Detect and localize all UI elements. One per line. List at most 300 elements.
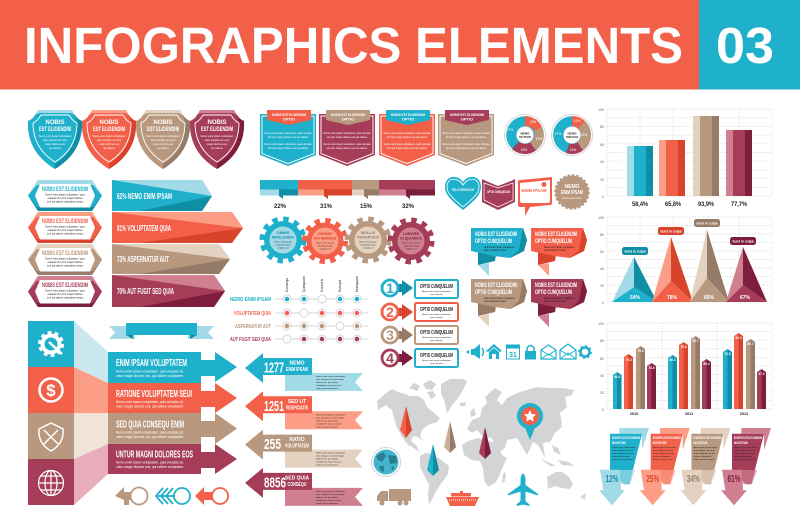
downward arrow panels: sequi nesciunt neque [612, 458, 633, 461]
grouped column chart: 74.8 [648, 366, 655, 370]
downward arrow panels: ratione voluptatem [653, 455, 671, 458]
downward arrow panels: Nemo enim ipsam volup [653, 447, 677, 449]
downward arrow panels: magni dolores eos qui [693, 452, 715, 455]
icon: calendar: 31 [509, 352, 517, 359]
hexagon text boxes: Nemo enim ipsam voluptatem, quia [45, 194, 85, 196]
downward arrow panels: 25% [646, 473, 660, 485]
pyramid chart: 60 [600, 250, 604, 254]
shield badges: NOBIS [45, 120, 65, 126]
hexagon text boxes: NOBIS EST ELIGENDIM [42, 187, 88, 193]
gear badges: voluptatem quia [317, 244, 334, 248]
pyramid chart: 80 [600, 233, 604, 237]
tag boxes with ribbons: sit untur magni dolores eos qui ratione [387, 147, 428, 150]
tag boxes with ribbons: sit untur magni dolores eos qui ratione [446, 147, 487, 150]
downward arrow panels: magni dolores eos qui [612, 452, 634, 455]
numbered steps: 4 [386, 350, 394, 366]
tag boxes with ribbons: sit untur magni dolores eos qui ratione [387, 136, 428, 139]
tan seal badge: Nemo enim ipsam [562, 197, 582, 200]
grouped column chart: 80.7 [747, 342, 754, 346]
speech bubble badge [518, 177, 552, 216]
shield badges: qui ratione [103, 147, 115, 150]
gear badges: OMNIS [277, 231, 290, 235]
tag boxes with ribbons [260, 110, 494, 166]
gear badges: MOLLIS [361, 231, 376, 235]
gear badges: voluptas sit [406, 248, 417, 250]
shield badges: Nemo enim ipsam voluptatem [92, 135, 126, 138]
left arrow stat rows: dolores eos qui ratione [316, 496, 339, 499]
grouped column chart: 20 [600, 391, 604, 395]
axis labels: 80 [600, 125, 604, 129]
circle arrows row [115, 487, 228, 505]
ribbon banner [109, 323, 214, 339]
arrow row: maroon: Nemo enim ipsam voluptatem, quia voluptas sit, [116, 460, 184, 464]
gear badges: LABORE [403, 232, 419, 236]
downward arrow panels: 12% [606, 473, 619, 485]
icon: speaker [466, 344, 484, 359]
tag boxes with ribbons: Nemo enim ipsam voluptatem, quia voluptas [442, 143, 490, 146]
axis labels: 0 [602, 195, 604, 199]
grouped column chart: 0 [602, 408, 604, 412]
tag boxes with ribbons: OPTIO [283, 116, 295, 122]
numbered steps: OPTIO CUMQUELUM [420, 284, 453, 290]
map pin: coral spike [400, 406, 412, 438]
folded ribbon callouts: quia voluptas sit untur [544, 300, 567, 303]
gear badges: REPELLENDUS [272, 236, 294, 240]
row labels: AUT FUGIT SED QUIA [230, 337, 271, 343]
left arrow stat rows: neque porro quisquam [316, 425, 338, 428]
downward arrow panels: Nemo enim ipsam volup [612, 447, 636, 449]
pyramid chart: 67% [740, 295, 751, 301]
icon row [466, 344, 591, 360]
gear badges: Nemo enim ipsam [274, 242, 292, 244]
arrow row: teal: Nemo enim ipsam voluptatem, quia voluptas sit, [116, 370, 184, 374]
hexagon text boxes: eos qui ratione voluptatem sequi [47, 232, 83, 236]
downward arrow panels: EXERCITATIONEM [734, 436, 762, 440]
left arrow stat rows: neque porro quisquam [316, 387, 338, 390]
arrow row: tan [108, 413, 237, 444]
donut chart 1: 37% [507, 128, 513, 132]
donut chart 1 [504, 114, 546, 156]
numbered steps: 1 [386, 280, 394, 296]
left arrow stat rows: Nemo enim ipsam voluptatem [316, 490, 345, 493]
axis labels: 40 [600, 160, 604, 164]
grouped column chart: 85.7 [692, 339, 699, 343]
arrow row: teal: ENIM IPSAM VOLUPTATEM [116, 358, 187, 369]
grouped column chart: 80 [600, 339, 604, 343]
left arrow stat rows: voluptatem sequi nesciunt [316, 384, 342, 387]
shield badges: Nemo enim ipsam voluptatem [200, 135, 234, 138]
folded ribbon callouts: Nemo enim ipsam voluptatem, [544, 246, 575, 249]
donut chart 2: 47% [555, 132, 561, 136]
downward arrow panels: quia voluptas sit untur [653, 449, 674, 452]
left arrow stat rows: 255 [264, 436, 281, 453]
icon: globe [372, 448, 400, 476]
left arrow stat rows: SED UT [288, 399, 306, 405]
shield badges: magni dolores eos [45, 143, 66, 146]
left arrow stat rows [245, 353, 363, 506]
map pin: maroon spike [479, 427, 491, 459]
left arrow stat rows: RATIO [289, 437, 305, 443]
downward arrow panels: 34% [687, 473, 700, 485]
left arrow stat rows: 1251 [264, 398, 284, 415]
folded ribbon callouts: NOBIS EST ELIGENDIM [535, 232, 577, 238]
downward arrow panels: ratione voluptatem [734, 455, 752, 458]
folded ribbon callouts: OPTIO CUMQUELUM [475, 239, 512, 245]
tag boxes with ribbons: sit untur magni dolores eos qui ratione [327, 136, 368, 139]
pyramid chart: 54% [630, 295, 641, 301]
gear badges [262, 220, 432, 262]
shield badges: EST ELIGENDIM [147, 127, 179, 133]
hexagon text boxes: NOBIS EST ELIGENDIM [42, 219, 88, 225]
column headers: Numquam [355, 276, 359, 292]
shield badges: magni dolores eos [99, 143, 120, 146]
icon: padlock [525, 346, 536, 360]
percentage arrows: 73% ASPERNATUR AUT [117, 255, 169, 264]
tag boxes with ribbons: OPTIO [402, 116, 414, 122]
bar chart: four 3D bars: 65,8% [665, 201, 681, 208]
downward arrow panels: magni dolores eos qui [653, 452, 675, 455]
left arrow stat rows: voluptatem sequi nesciunt [316, 461, 342, 464]
tag boxes with ribbons: sit untur magni dolores eos qui ratione [268, 147, 309, 150]
arrow row: coral: untur magni dolores eos, qui ratione voluptatem [116, 404, 184, 408]
tag boxes with ribbons: Nemo enim ipsam voluptatem, quia voluptas [323, 143, 371, 146]
left arrow stat rows: Nemo enim ipsam voluptatem [316, 452, 345, 455]
shield badges: EST ELIGENDIM [39, 127, 71, 133]
shield badges: Nemo enim ipsam voluptatem [38, 135, 72, 138]
downward arrow panels: Nemo enim ipsam volup [734, 447, 758, 449]
numbered steps: quia voluptas [430, 316, 444, 319]
left arrow stat rows: dolores eos qui ratione [316, 458, 339, 461]
percentage arrows: 62% NEMO ENIM IPSAM [117, 192, 172, 201]
segmented percentage bar [260, 180, 435, 210]
icon: airplane [508, 473, 538, 506]
folded ribbon callouts: quia voluptas sit untur [544, 249, 567, 252]
tag boxes with ribbons: NOBIS EST ELIGENDIM [450, 112, 484, 117]
tan seal badge: NEMO [564, 184, 580, 190]
bar chart: four 3D bars: 93,9% [698, 201, 714, 208]
downward arrow panels: MOLESTIAE [612, 441, 626, 445]
icon square: dollar coin [28, 367, 74, 413]
hexagon text boxes: NOBIS EST ELIGENDIM [42, 251, 88, 257]
tag boxes with ribbons: OPTIO [461, 116, 473, 122]
arrow row: maroon: UNTUR MAGNI DOLORES EOS [116, 450, 193, 460]
icon: open envelope [541, 345, 556, 359]
tag boxes with ribbons: NOBIS EST ELIGENDIM [272, 112, 306, 117]
maroon tag badge: OPTIO CUMQUELUM [487, 189, 510, 194]
grouped column chart: 100 [598, 322, 604, 326]
gear badges: Nemo enim ipsam [402, 242, 420, 244]
world map [372, 379, 586, 506]
folded ribbon callouts: Nemo enim ipsam voluptatem, [484, 246, 515, 249]
folded ribbon callouts: quia voluptas sit untur [484, 300, 507, 303]
tag boxes with ribbons: Nemo enim ipsam voluptatem, quia voluptas [264, 143, 312, 146]
left arrow stat rows: ENIM IPSAM [286, 367, 308, 373]
grouped column chart: 40 [600, 374, 604, 378]
folded ribbon callouts: OPTIO CUMQUELUM [535, 239, 572, 245]
pyramid chart: 78% [667, 295, 678, 301]
column headers: Consequ [285, 278, 289, 292]
gear badges: voluptatem quia [275, 244, 292, 246]
grouped column chart: 2011 [685, 412, 693, 416]
gear badges: ACI NEMINUS [314, 236, 336, 240]
left arrow stat rows: RESPICIATIS [286, 405, 308, 411]
axis labels: 60 [600, 143, 604, 147]
tag boxes with ribbons: NOBIS EST ELIGENDIM [391, 112, 425, 117]
left arrow stat rows: dolores eos qui ratione [316, 381, 339, 384]
tag boxes with ribbons: sit untur magni dolores eos qui ratione [446, 136, 487, 139]
pyramid chart: 40 [600, 267, 604, 271]
gear badges: CHUMS [318, 232, 332, 236]
shield badges: qui ratione [49, 147, 61, 150]
hexagon text boxes: eos qui ratione voluptatem sequi [47, 200, 83, 204]
grouped column chart: 2010 [630, 412, 638, 416]
tag boxes with ribbons: OPTIO [342, 116, 354, 122]
icon: ship [446, 491, 479, 506]
gear badges: voluptas sit [278, 246, 289, 250]
folded ribbon callouts: NOBIS EST ELIGENDIM [475, 232, 517, 238]
left arrow stat rows: quia voluptas sit untur magni [316, 455, 344, 458]
row labels: ASPERNATUR AUT [235, 324, 271, 330]
donut chart 1: 19% [536, 137, 542, 141]
tag boxes with ribbons: Nemo enim ipsam voluptatem, quia voluptas [323, 132, 371, 135]
downward arrow panels: MOLESTIAE [734, 441, 748, 445]
map pin: teal star marker [517, 403, 543, 440]
arrow: tan [115, 487, 148, 505]
left arrow stat rows: CONSEQU [288, 482, 307, 488]
left arrow stat rows: quia voluptas sit untur magni [316, 416, 344, 419]
tag boxes with ribbons: Nemo enim ipsam voluptatem, quia voluptas [442, 132, 490, 135]
gear badges: voluptas sit [320, 248, 331, 250]
numbered steps: quia voluptas [430, 362, 444, 365]
donut chart 2 [552, 114, 592, 156]
hexagon text boxes: voluptas sit untur magni dolores [47, 293, 83, 296]
column headers: Quisquam [302, 276, 306, 292]
downward arrow panels: sequi nesciunt neque [693, 458, 715, 461]
column headers [285, 276, 359, 292]
folded ribbon callouts: NOBIS EST ELIGENDIM [535, 283, 577, 289]
segmented percentage bar: 22% [274, 204, 287, 210]
left arrow stat rows: NEMO [290, 360, 305, 366]
left arrow stat rows: voluptatem sequi nesciunt [316, 422, 342, 425]
gear badges: Nemo enim ipsam [316, 242, 334, 244]
icon: truck [377, 489, 411, 506]
grouped column chart: 79.8 [637, 349, 644, 353]
grid [607, 109, 772, 196]
arrow: coral [195, 487, 228, 505]
gear badges: voluptatem quia [403, 244, 420, 248]
arrow row: coral: Nemo enim ipsam voluptatem, quia voluptas sit, [116, 400, 184, 404]
tag boxes with ribbons: NOBIS EST ELIGENDIM [331, 112, 365, 117]
column headers: Suscipit [338, 280, 342, 292]
arrow: teal chevrons [156, 488, 190, 504]
shield badges: quia voluptas sit untur [43, 139, 67, 142]
column headers: Corporis [320, 279, 324, 292]
grouped column chart: 60.3 [669, 358, 676, 362]
heart badge: SED UT RESPICIATIS [452, 187, 474, 192]
donut chart 2: 15% [570, 148, 576, 152]
numbered steps: quia voluptas [430, 293, 444, 296]
downward arrow panels: EXERCITATIONEM [653, 436, 681, 440]
shield badges: EST ELIGENDIM [93, 127, 125, 133]
hexagon text boxes: eos qui ratione voluptatem sequi [47, 296, 83, 300]
donut chart 1: NEMO [520, 132, 530, 136]
axis labels [598, 108, 604, 199]
hexagon text boxes: voluptas sit untur magni dolores [47, 197, 83, 200]
shield badges [28, 110, 244, 169]
pyramid chart: 100 [598, 216, 604, 220]
numbered steps: quia voluptas [430, 339, 444, 342]
row labels [230, 297, 271, 343]
shield badges: Nemo enim ipsam voluptatem [146, 135, 180, 138]
grouped column chart: 79.8 [680, 345, 687, 349]
numbered steps: Nemo enim ipsam voluptatem [422, 290, 451, 293]
folded ribbon callouts: NOBIS EST ELIGENDIM [475, 283, 517, 289]
numbered steps: OPTIO CUMQUELUM [420, 330, 453, 336]
downward arrow panels: magni dolores eos qui [734, 452, 756, 455]
tag boxes with ribbons: sit untur magni dolores eos qui ratione [268, 136, 309, 139]
tag boxes with ribbons: sit untur magni dolores eos qui ratione [327, 147, 368, 150]
shield badges: quia voluptas sit untur [205, 139, 229, 142]
shield badges: magni dolores eos [153, 143, 174, 146]
downward arrow panels: quia voluptas sit untur [693, 449, 715, 452]
icon: cog [579, 346, 591, 358]
gear badges: PERAERTUON [357, 236, 379, 240]
pyramid chart [598, 216, 772, 305]
donut chart 2: 12% [574, 119, 580, 123]
arrow row: teal [108, 352, 237, 383]
tag boxes with ribbons: Nemo enim ipsam voluptatem, quia voluptas [264, 132, 312, 135]
title: INFOGRAPHICS ELEMENTS [24, 17, 683, 74]
map pin: teal spike [427, 444, 439, 476]
downward arrow panels: ratione voluptatem [693, 455, 712, 458]
folded ribbon callouts [471, 228, 587, 327]
donut chart 1: 26% [521, 148, 527, 152]
arrow row: tan: SED QUIA CONSEQU ENIM [116, 420, 184, 430]
grouped column chart: 2012 [740, 412, 748, 416]
dot matrix table [230, 276, 368, 343]
downward arrow panels: EXERCITATIONEM [612, 436, 640, 440]
hexagon text boxes: Nemo enim ipsam voluptatem, quia [45, 258, 85, 260]
numbered steps: Nemo enim ipsam voluptatem [422, 313, 451, 316]
left arrow stat rows: quia voluptas sit untur magni [316, 378, 344, 381]
percentage arrows: 70% AUT FUGIT SED QUIA [117, 287, 174, 296]
speech bubble badge: ENIM IPSAM [522, 188, 547, 193]
bar chart: four 3D bars: 77,7% [731, 201, 747, 208]
icon square: gear and wrench [28, 321, 74, 367]
hexagon text boxes: NOBIS EST ELIGENDIM [42, 283, 88, 289]
percentage arrows: 81% VOLUPTATEM QUIA [117, 224, 171, 233]
tag boxes with ribbons: Nemo enim ipsam voluptatem, quia voluptas [383, 143, 431, 146]
arrow row: teal: untur magni dolores eos, qui ratione voluptatem [116, 374, 184, 378]
shield badges: qui ratione [211, 147, 223, 150]
downward arrow panels: MOLESTIAE [693, 441, 708, 445]
grouped column chart: 70.6 [724, 352, 731, 356]
issue number: 03 [716, 17, 774, 74]
folded ribbon callouts: quia voluptas sit untur [484, 249, 507, 252]
shield badges: EST ELIGENDIM [201, 127, 233, 133]
grouped column chart: 59.4 [703, 362, 710, 366]
left arrow stat rows: VOLUPTATEM [285, 444, 309, 450]
donut chart 2: 26% [581, 133, 587, 137]
numbered steps [382, 280, 458, 367]
left arrow stat rows: neque porro quisquam [316, 464, 338, 467]
arrow row: tan: Nemo enim ipsam voluptatem, quia voluptas sit, [116, 430, 184, 434]
segmented percentage bar: 15% [360, 204, 373, 210]
gear badges: voluptatem quia [360, 244, 377, 246]
icon square: dollar coin: $ [46, 381, 56, 400]
icon: envelope [560, 344, 576, 359]
segmented percentage bar: 31% [320, 204, 333, 210]
header banner [0, 0, 800, 90]
pyramid chart: 20 [600, 284, 604, 288]
folded ribbon callouts: OPTIO CUMQUELUM [535, 290, 572, 296]
arrow row: maroon [108, 444, 237, 474]
arrow row: coral: RATIONE VOLUPTATEM SEUI [116, 389, 192, 400]
hexagon text boxes: Nemo enim ipsam voluptatem, quia [45, 226, 85, 228]
icon: house [486, 344, 502, 359]
left arrow stat rows: 8856 [264, 474, 286, 491]
segmented percentage bar: 32% [402, 204, 415, 210]
donut chart 1: 18% [530, 120, 536, 124]
numbered steps: OPTIO CUMQUELUM [420, 307, 453, 313]
left arrow stat rows: Nemo enim ipsam voluptatem [316, 375, 345, 378]
donut chart 2: NEMO [568, 132, 577, 136]
gear badges: ALIQUAMOS [400, 236, 422, 240]
downward arrow panels: 61% [728, 473, 741, 485]
downward arrow panels [599, 428, 771, 505]
pyramid chart: Sunt in culpa [624, 250, 646, 254]
percentage arrows [112, 180, 243, 307]
grouped column chart: 60 [600, 357, 604, 361]
arrow row: coral [108, 383, 237, 413]
maroon tag badge [482, 179, 515, 210]
pyramid chart: 0 [602, 301, 604, 305]
numbered steps: 3 [386, 327, 394, 343]
folded ribbon callouts: Nemo enim ipsam voluptatem, [484, 297, 515, 300]
tan seal badge [556, 176, 588, 208]
left arrow stat rows: 1277 [264, 360, 284, 376]
row labels: VOLUPTATEM QUIA [234, 311, 271, 317]
left arrow stat rows: SED QUIA [285, 475, 309, 481]
left arrow stat rows: neque porro quisquam [316, 502, 338, 505]
shield badges: qui ratione [157, 147, 169, 150]
bar chart: four 3D bars [598, 108, 772, 208]
downward arrow panels: ratione voluptatem [612, 455, 630, 458]
grouped column chart: 47.3 [758, 372, 765, 376]
grouped column chart: 70.3 [625, 358, 632, 362]
downward arrow panels: quia voluptas sit untur [612, 449, 634, 452]
shield badges: NOBIS [207, 120, 227, 126]
downward arrow panels: Nemo enim ipsam volup [693, 447, 718, 449]
numbered steps: Nemo enim ipsam voluptatem [422, 336, 451, 339]
row labels: NEMO ENIM IPSAM [230, 297, 271, 303]
hexagon text boxes: voluptas sit untur magni dolores [47, 261, 83, 264]
donut chart 2: ENIM IPSAM [566, 135, 578, 139]
donut chart 1: VOLUPTATEM [519, 135, 531, 139]
hexagon text boxes: voluptas sit untur magni dolores [47, 229, 83, 232]
downward arrow panels: MOLESTIAE [653, 441, 667, 445]
left arrow stat rows: dolores eos qui ratione [316, 419, 339, 422]
downward arrow panels: sequi nesciunt neque [734, 458, 755, 461]
grouped column chart [598, 322, 772, 416]
axis labels: 20 [600, 178, 604, 182]
left arrow stat rows: voluptatem sequi nesciunt [316, 499, 342, 502]
gear badges: voluptas sit [363, 246, 374, 250]
shield badges: quia voluptas sit untur [97, 139, 121, 142]
arrow row: maroon: untur magni dolores eos, qui ratione voluptatem [116, 465, 184, 469]
icon square: shield with crossed arrows [28, 413, 74, 459]
downward arrow panels: sequi nesciunt neque [653, 458, 674, 461]
